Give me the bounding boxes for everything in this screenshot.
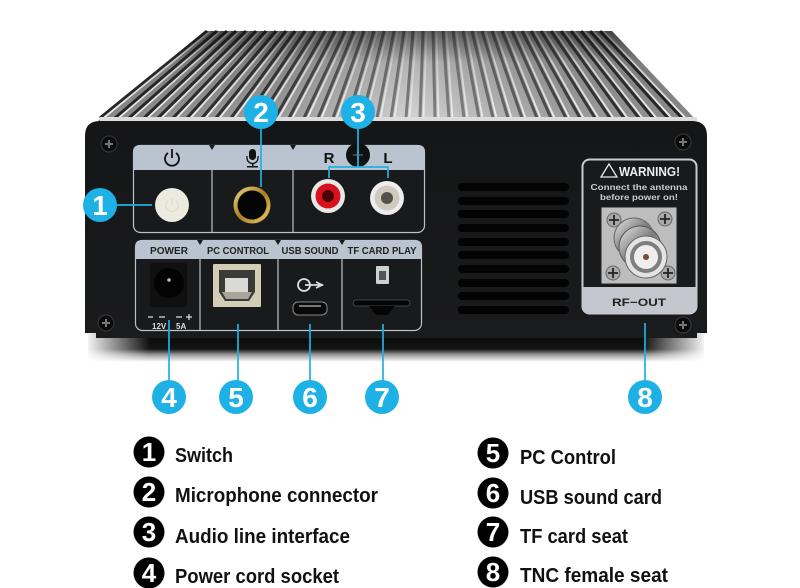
power button [155,188,189,222]
legend item 2: Microphone connector [134,476,378,508]
badge 6: 6 [302,382,318,413]
badge 4 [152,380,186,414]
legend item 8: TNC female seat [478,556,668,588]
legend item 4: Power cord socket: Power cord socket [175,566,339,588]
badge 3: 3 [350,97,366,128]
microphone jack [234,186,270,224]
badge 7: 7 [374,382,390,413]
leader lines [110,125,645,385]
legend item 5: PC Control: PC Control [520,447,616,469]
USB-B port [213,264,261,307]
legend item 8: TNC female seat: TNC female seat [520,565,668,587]
legend item 6: USB sound card: 6 [486,478,500,508]
badge 5: 5 [228,382,244,413]
TNC connector [601,207,677,284]
DC power jack [150,263,187,307]
panel: power, PC control, USB sound, TF card [135,240,422,331]
floor shadow [88,333,704,362]
legend item 3: Audio line interface [134,516,350,548]
badge 4: 4 [161,382,177,413]
badge 3 [341,95,375,129]
legend: left column [134,436,378,588]
badge 8: 8 [637,382,653,413]
device rear body [85,121,707,338]
TF card slot [353,300,410,315]
badge 8 [628,380,662,414]
center screw [346,143,370,167]
warning message [590,182,688,202]
panel: switch, microphone, audio [133,143,425,233]
icon: USB sound [298,279,323,291]
icon: microphone [247,149,258,168]
legend item 5: PC Control: 5 [486,438,500,468]
label: L: L [383,150,393,167]
badge 2: 2 [253,97,269,128]
polarity marking: 5A [176,322,186,331]
legend: right column [478,438,668,588]
badge 1 [83,188,117,222]
warning message: Connect the antenna [590,182,688,192]
legend item 3: Audio line interface: Audio line interface [175,526,350,548]
legend item 1: Switch: 1 [142,437,156,467]
warning message: before power on! [600,192,678,202]
polarity marking: 12V [152,322,167,331]
legend item 1: Switch: Switch [175,445,233,467]
label: TF CARD PLAY: TF CARD PLAY [348,246,417,257]
legend item 4: Power cord socket [134,558,339,588]
label: POWER: POWER [150,246,189,257]
label: PC CONTROL: PC CONTROL [207,246,269,257]
badge 1: 1 [92,190,108,221]
legend item 3: Audio line interface: 3 [142,517,156,547]
micro USB port [293,302,327,315]
badge 2 [244,95,278,129]
legend item 4: Power cord socket: 4 [142,558,157,588]
icon: warning triangle [601,164,617,177]
icon: power symbol [165,149,179,166]
legend item 6: USB sound card: USB sound card [520,487,662,509]
legend item 2: Microphone connector: Microphone connector [175,485,378,507]
badge 5 [219,380,253,414]
badge 6 [293,380,327,414]
warning heading: WARNING! [619,165,680,179]
label: RF-OUT: RF−OUT [612,297,666,309]
RCA jack L [370,181,404,215]
polarity marking [148,314,192,331]
panel: RF-OUT warning [582,160,697,314]
legend item 8: TNC female seat: 8 [486,557,500,587]
legend item 2: Microphone connector: 2 [142,477,156,507]
legend item 6: USB sound card [478,478,662,509]
badge 7 [365,380,399,414]
label: USB SOUND: USB SOUND [282,246,338,257]
heat sink fins [98,31,697,121]
label: R: R [324,150,335,167]
legend item 1: Switch [134,436,233,468]
legend item 7: TF card seat: 7 [486,517,500,547]
legend item 5: PC Control [478,438,616,469]
legend item 7: TF card seat: TF card seat [520,526,628,548]
corner screws [98,134,691,333]
icon: TF card [376,266,389,284]
RCA jack R [311,179,345,213]
legend item 7: TF card seat [478,516,628,548]
ventilation slots [458,183,569,314]
